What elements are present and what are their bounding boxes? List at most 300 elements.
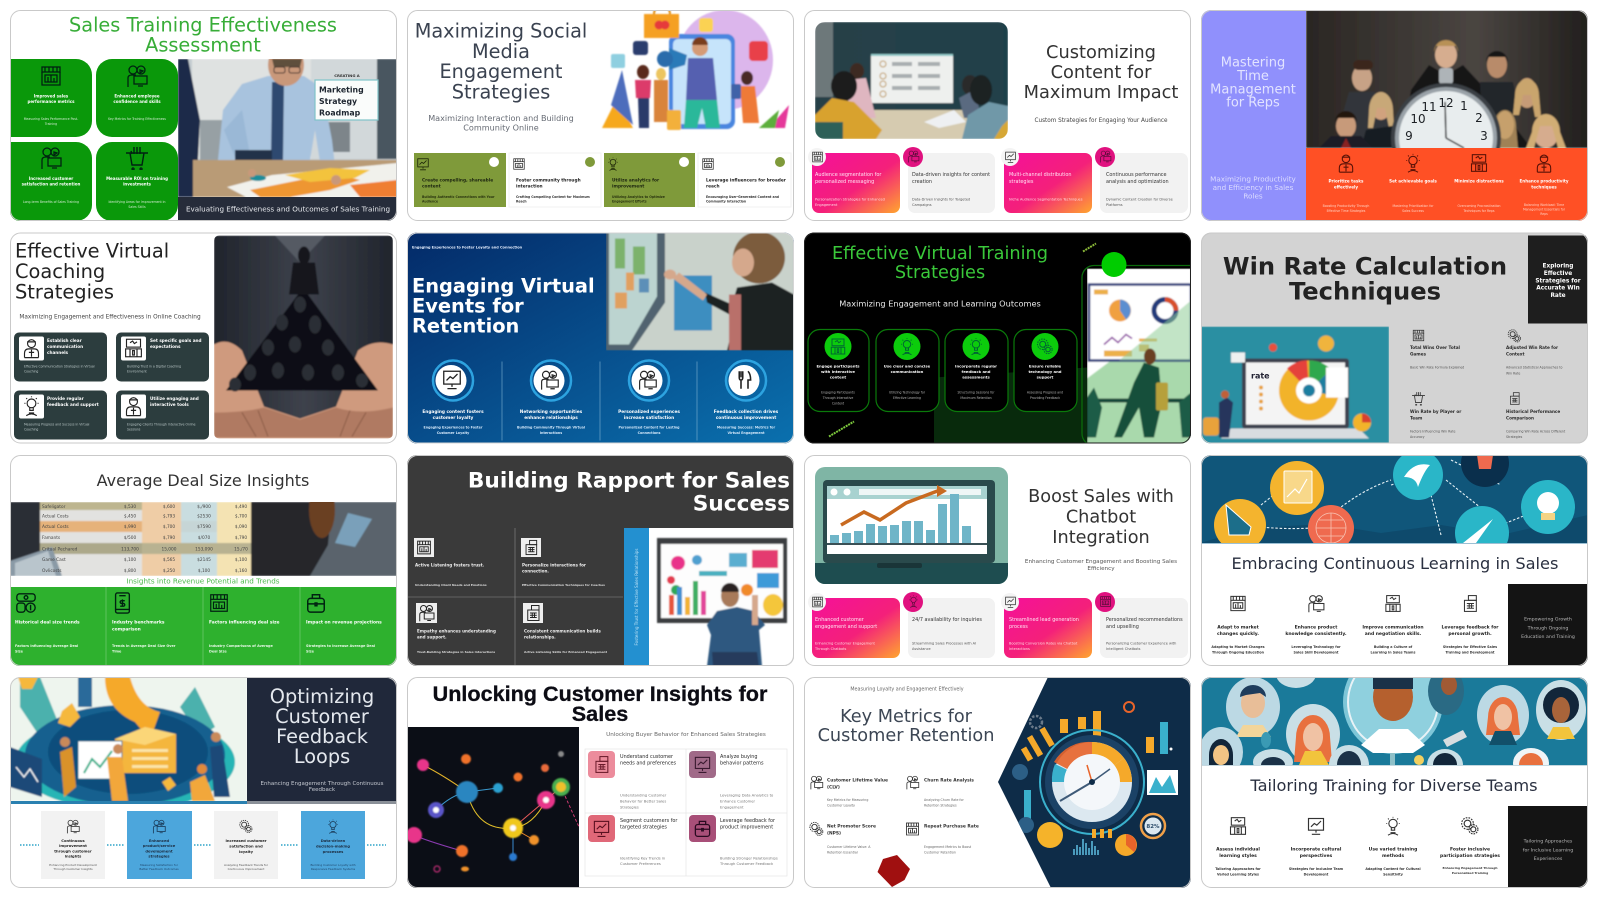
table values: $2145 — [197, 557, 211, 563]
icon — [907, 776, 919, 789]
subtitle: Efficiency — [1087, 566, 1115, 572]
subtext: Engagement — [720, 805, 744, 809]
item: NPS — [810, 822, 876, 855]
subtitle: Custom Strategies for Engaging Your Audience — [1035, 118, 1168, 124]
panel: Engaging Virtual Events for Retention — [407, 232, 794, 444]
item: adjusted win rate — [1506, 330, 1563, 375]
icon — [810, 822, 823, 835]
icon — [1309, 596, 1324, 612]
title: Maximum Impact — [1024, 82, 1178, 103]
subtext: Factors Influencing Average Deal — [15, 644, 78, 648]
subtext: Through Customer Feedback — [719, 862, 774, 866]
icon tile — [416, 603, 437, 623]
heading: Data-driven — [321, 839, 346, 843]
subtext: Leveraging Data Analytics to — [720, 793, 774, 797]
title: Strategies — [15, 280, 114, 303]
callout: black box: Exploring — [1543, 264, 1573, 270]
heading: Utilize engaging and — [150, 396, 199, 401]
subtext: Engaging Experiences to Foster — [424, 426, 483, 430]
subtext: Time — [112, 650, 122, 654]
heading: Provide regular — [47, 396, 85, 401]
subtext: Providing Feedback — [1030, 396, 1060, 400]
table values: $,160 — [235, 568, 247, 574]
heading: methods — [1382, 853, 1404, 859]
illustration: social media team — [602, 6, 789, 130]
sign: creating a marketing strategy roadmap: Marketing — [319, 86, 364, 94]
icon: store — [514, 159, 524, 169]
title: Strategies — [895, 263, 985, 283]
table values: 113,700 — [121, 546, 139, 552]
subtext: Basic Win Rate Formula Explained — [1410, 366, 1464, 370]
clock numerals: 3 — [1480, 129, 1488, 143]
table values: Actual Costs — [42, 524, 69, 530]
illustration: data network — [406, 727, 579, 888]
item: total wins — [1410, 330, 1464, 370]
heading: loyalty — [239, 850, 254, 854]
panel: Effective Virtual Coaching Strategies — [10, 232, 397, 444]
green panel — [10, 587, 397, 666]
heading: personal growth. — [1448, 631, 1492, 637]
accent: red polygon — [878, 855, 910, 887]
title: Customer — [275, 705, 369, 728]
icon — [1386, 596, 1400, 611]
clock numerals: 10 — [1410, 112, 1426, 126]
subtext: Niche Audience Segmentation Techniques — [1009, 198, 1083, 202]
subtext: Customer Loyalty — [827, 804, 855, 808]
subtext: Reps — [1540, 212, 1548, 216]
subtext: Retention Strategies — [924, 804, 957, 808]
heading: Assess individual — [1216, 846, 1260, 852]
card: increased customer satisfaction — [10, 142, 92, 221]
title: Time — [1236, 69, 1269, 84]
title: Strategies — [452, 80, 550, 103]
icon: gear badge — [1001, 148, 1019, 166]
subtitle: Maximizing Engagement and Learning Outcomes — [839, 298, 1041, 308]
heading: (NPS) — [827, 830, 841, 836]
table values: $,790 — [163, 535, 175, 541]
photo: team behind clock — [1306, 10, 1588, 193]
screen label: rate — [1251, 372, 1270, 380]
item: minimize distractions — [1454, 155, 1504, 213]
heading: Repeat Purchase Rate — [924, 824, 979, 830]
title: Loops — [294, 745, 350, 768]
subtext: Key Metrics for Training Effectiveness — [108, 117, 166, 121]
card: provide regular feedback — [14, 390, 107, 440]
heading: content — [830, 374, 846, 380]
heading: Set specific goals and — [150, 338, 202, 343]
table values: $,100 — [235, 557, 247, 563]
strip: rotated subtitle: Fostering Trust for Effective Sales Relationships — [634, 548, 639, 646]
subtext: Measuring Sales Performance Post- — [24, 117, 78, 121]
subtext: Strategies — [1506, 435, 1523, 439]
subtext: Effective Communication Strategies in Virtual — [24, 364, 95, 368]
callout: black box: Effective — [1544, 271, 1572, 277]
heading: Empathy enhances understanding — [417, 628, 496, 634]
heading: and support. — [417, 634, 447, 640]
subtext: Analyzing Feedback Trends for — [224, 863, 269, 867]
heading: Enhanced customer — [815, 617, 865, 623]
subtext: Crafting Compelling Content for Maximum — [516, 195, 590, 199]
heading: Segment customers for — [620, 818, 678, 824]
panel: Sales Training Effectiveness Assessment — [10, 10, 397, 221]
icon tile — [19, 336, 44, 360]
card: improved sales performance metrics — [10, 59, 92, 137]
subtext: Data-Driven Insights for Targeted — [912, 198, 970, 202]
heading: Prioritize tasks — [1329, 178, 1364, 184]
subtext: Leveraging Technology for — [1291, 645, 1341, 649]
card: continuous improvement — [41, 811, 105, 879]
table values: Safeligator — [42, 504, 66, 510]
subtext: Assessing Progress and — [1027, 390, 1063, 394]
heading: Adapt to market — [1217, 624, 1260, 630]
card: engage participants — [808, 330, 869, 412]
card: utilize interactive tools — [116, 390, 209, 440]
subtext: Enhancing Product Development — [49, 863, 98, 867]
table values: Critual Pechared — [42, 546, 78, 552]
icon tile — [19, 394, 44, 418]
card: enhanced employee confidence — [96, 59, 178, 137]
callout: black box: Education and Training — [1521, 634, 1575, 640]
icon — [1386, 817, 1400, 835]
subtext: Measuring Satisfaction for — [140, 863, 179, 867]
heading: with interactive — [821, 369, 855, 374]
subtext: Retention Essential — [827, 851, 858, 855]
heading: personalized messaging — [815, 179, 874, 185]
callout: black box — [1528, 236, 1588, 324]
card: measurable ROI — [96, 142, 178, 221]
photo: team meeting — [815, 22, 1008, 139]
item: enhance productivity — [1519, 155, 1569, 216]
card: data-driven decisions — [301, 811, 365, 879]
heading: Incorporate cultural — [1291, 846, 1342, 852]
card: utilize analytics — [604, 153, 695, 207]
subtext: Long-term Benefits of Sales Training — [23, 200, 79, 204]
sidebar: purple — [1201, 10, 1306, 221]
cell: understand customer needs — [588, 751, 677, 809]
subtext: Trends in Average Deal Size Over — [112, 644, 176, 648]
heading: Increased customer — [225, 839, 267, 843]
item: historical performance — [1506, 393, 1566, 439]
subtext: Better Feedback Outcomes — [139, 867, 179, 871]
heading: confidence and skills — [113, 99, 161, 104]
icon ring — [433, 360, 473, 400]
strip: rotated subtitle — [624, 528, 649, 666]
item: assess learning styles — [1215, 818, 1261, 876]
subtext: Adapting to Market Changes — [1211, 645, 1265, 649]
heading: communication — [47, 344, 83, 349]
subtext: Strategies for Effective Sales — [1443, 645, 1497, 649]
heading: channels — [47, 350, 69, 355]
table values: $/070 — [198, 535, 210, 541]
heading: Enhanced employee — [114, 94, 160, 98]
illustration: win rate laptop — [1201, 326, 1389, 444]
heading: technology and — [1028, 369, 1062, 374]
subtext: Building Customer Loyalty with — [310, 863, 356, 867]
eyebrow: Engaging Experiences to Foster Loyalty and Connection — [412, 246, 523, 250]
heading: Audience segmentation for — [815, 172, 882, 178]
dividers — [502, 362, 697, 440]
heading: engagement and support — [815, 624, 877, 630]
card: personalized recommendations — [1095, 592, 1188, 658]
table values: $,800 — [124, 568, 136, 574]
panel: Boost Sales with Chatbot Integration — [804, 455, 1191, 666]
item: win rate by player — [1410, 392, 1462, 439]
clock numerals: 1 — [1460, 99, 1468, 113]
subtext: Sales Skills — [128, 205, 146, 209]
subtext: Campaigns — [912, 203, 932, 207]
subtext: Coaching — [24, 370, 38, 374]
panel: Optimizing Customer Feedback Loops — [10, 677, 397, 888]
subtext: Customer Loyalty — [437, 431, 470, 435]
icon circle — [1032, 333, 1058, 360]
card: streamlined lead generation — [1001, 593, 1092, 658]
icon tile — [588, 815, 615, 842]
subtext: Through Interactive — [822, 396, 853, 400]
subtext: Training and Development — [1446, 650, 1495, 654]
subtext: Industry Comparisons of Average — [209, 644, 273, 648]
heading: knowledge consistently. — [1285, 631, 1347, 637]
icon badge — [1001, 593, 1019, 611]
item: adapt to market — [1211, 596, 1265, 654]
illustration: retention dial: 82% — [1146, 824, 1160, 830]
heading: Adjusted Win Rate for — [1506, 345, 1559, 350]
cell: personalize interactions — [521, 538, 605, 587]
table values: $,100 — [198, 568, 210, 574]
item: churn rate — [907, 776, 974, 808]
subtext: Analyzing Churn Rate for — [924, 798, 964, 802]
subtext: Coaching — [24, 428, 38, 432]
item: incorporate perspectives — [1289, 818, 1344, 876]
subtext: Personalized Content for Lasting — [618, 426, 680, 430]
subtext: Identifying Key Trends in — [620, 856, 666, 860]
heading: continuous improvement — [716, 415, 776, 421]
subtext: Community Interaction — [706, 200, 746, 204]
illustration: learning network — [1201, 439, 1588, 560]
icon tile — [689, 815, 716, 842]
title: Building Rapport for Sales — [468, 469, 790, 494]
squiggle accents — [829, 244, 1096, 436]
table values: $,565 — [163, 557, 175, 563]
title: Feedback — [276, 725, 369, 748]
icon: pink badge — [1095, 147, 1115, 167]
card: use clear communication — [876, 330, 939, 412]
heading: Establish clear — [47, 338, 83, 343]
illustration: feedback box and team — [10, 677, 247, 810]
subtext: Through Customer Insights — [52, 867, 93, 871]
heading: Use clear and concise — [884, 364, 931, 368]
badge — [679, 157, 689, 167]
item: personalized experiences — [618, 360, 680, 435]
subtext: Understanding Client Needs and Emotions — [415, 583, 487, 587]
sign: creating a marketing strategy roadmap — [315, 73, 378, 120]
icon — [116, 593, 129, 613]
subtext: Comparing Win Rate Across Different — [1506, 430, 1566, 434]
icon — [153, 820, 165, 833]
icon — [1508, 330, 1520, 342]
title: Content for — [1051, 62, 1152, 83]
icon — [1472, 155, 1486, 171]
heading: through customer — [54, 849, 92, 853]
icon — [67, 820, 79, 833]
title: Techniques — [1289, 278, 1441, 306]
table values: Actual Costs — [42, 514, 69, 520]
heading: Enhanced — [149, 839, 169, 843]
panel: Effective Virtual Training Strategies — [804, 232, 1202, 446]
subtext: Sessions — [127, 428, 141, 432]
subtitle: Community Online — [463, 122, 539, 132]
card: data-driven insights — [903, 147, 995, 213]
icon: people — [42, 148, 61, 169]
icon circle — [824, 333, 852, 360]
subtext: Adapting Content for Cultural — [1365, 867, 1421, 871]
subtext: Enhancing Customer Engagement — [815, 642, 876, 646]
heading: Churn Rate Analysis — [924, 778, 974, 784]
heading: processes — [323, 850, 344, 854]
clock numerals: 9 — [1405, 129, 1413, 143]
heading: Customer Lifetime Value — [827, 778, 888, 784]
orange panel — [1306, 148, 1588, 221]
subtitle: and Efficiency in Sales — [1213, 183, 1294, 192]
subtext: Streamlining Sales Processes with AI — [912, 642, 976, 646]
callout: black box: Experiences — [1534, 856, 1563, 862]
subtext: Effective Communication Techniques for Coaches — [522, 583, 605, 587]
subtext: Personalization Strategies for Enhanced — [815, 198, 885, 202]
cell: segment customers — [588, 815, 678, 866]
subtext: Content — [832, 401, 845, 405]
title: Media — [472, 40, 530, 63]
heading: Leverage feedback for — [1441, 624, 1499, 630]
item: foster inclusive participation — [1440, 818, 1500, 875]
heading: process — [1009, 624, 1028, 630]
subtext: Balancing Workload: Time — [1524, 203, 1564, 207]
subtext: Sensitivity — [1383, 872, 1404, 876]
icon — [1413, 330, 1424, 341]
subtext: Size — [306, 650, 315, 654]
subtext: Enhancing Engagement Through — [1442, 866, 1498, 870]
heading: Leverage influencers for broader — [706, 178, 787, 184]
heading: Total Wins Over Total — [1410, 345, 1461, 350]
heading: Feedback collection drives — [714, 409, 779, 415]
panel: Customizing Content for Maximum Impact — [804, 10, 1191, 221]
icon circle — [962, 333, 990, 360]
table values: $,793 — [163, 514, 175, 520]
subtext: Strategies for Inclusive Team — [1289, 867, 1344, 871]
badge — [775, 157, 785, 167]
heading: and upselling — [1106, 624, 1139, 630]
item: set achievable goals — [1389, 154, 1437, 213]
cell: leverage feedback — [689, 815, 778, 866]
heading: improvement — [59, 844, 87, 848]
table values: $7590 — [197, 524, 211, 530]
table values: $,450 — [124, 514, 136, 520]
item: prioritize tasks — [1323, 155, 1369, 213]
subtitle: Enhancing Engagement Through Continuous — [260, 781, 384, 787]
icon — [1462, 818, 1478, 834]
badge — [585, 157, 595, 167]
card: continuous performance — [1095, 147, 1188, 213]
subtext: Identifying Areas for Improvement in — [108, 200, 166, 204]
heading: Enhance productivity — [1519, 178, 1569, 184]
panel: Maximizing Social Media Engagement Strategies — [407, 6, 794, 221]
eyebrow: Measuring Loyalty and Engagement Effectively — [850, 687, 964, 693]
heading: behavior patterns — [720, 760, 764, 766]
accent circle — [1102, 252, 1126, 277]
panel: Building Rapport for Sales Success — [407, 455, 794, 666]
icon — [17, 594, 35, 612]
subtext: Accuracy — [1410, 435, 1425, 439]
icon badge — [808, 593, 826, 611]
grid lines — [585, 749, 787, 876]
icon — [1339, 155, 1353, 172]
cell: analyze buying behavior — [689, 751, 774, 809]
title: Customer Retention — [818, 726, 994, 746]
heading: Minimize distractions — [1454, 178, 1504, 184]
table values: $,250 — [163, 568, 175, 574]
photo: spreadsheet and analyst — [10, 482, 397, 576]
icon: store badge — [808, 148, 826, 166]
table values: $,090 — [235, 524, 247, 530]
subtext: Audience — [422, 200, 438, 204]
subtext: Learning in Sales Teams — [1371, 650, 1415, 654]
table values: $2530 — [197, 514, 211, 520]
panel: Embracing Continuous Learning in Sales — [1201, 439, 1588, 666]
heading: Win Rate by Player or — [1410, 409, 1462, 414]
sign: creating a marketing strategy roadmap: CREATING A — [334, 73, 360, 78]
title: Success — [693, 492, 790, 517]
panel: Unlocking Customer Insights for Sales — [406, 677, 794, 888]
heading: Comparison — [1506, 416, 1534, 420]
heading: content — [422, 184, 441, 190]
illustration: retention dial — [994, 677, 1191, 888]
title: Coaching — [15, 260, 105, 283]
heading: changes quickly. — [1217, 631, 1259, 637]
callout: black box: Empowering Growth — [1524, 617, 1572, 623]
illustration: diverse team portraits — [1199, 650, 1588, 785]
heading: Improve communication — [1362, 624, 1424, 630]
subtext: Development — [1304, 872, 1329, 876]
subtext: Effective Learning — [893, 396, 921, 400]
title: Optimizing — [270, 685, 374, 708]
heading: Team — [1410, 416, 1423, 420]
subtext: Advanced Statistical Approaches to — [1506, 366, 1563, 370]
cell: active listening — [414, 538, 487, 587]
subtext: Through Ongoing Education — [1212, 650, 1265, 654]
subtext: Interactions — [540, 431, 562, 435]
heading: development — [145, 849, 173, 853]
heading: creation — [912, 179, 932, 185]
heading: support — [1037, 374, 1054, 380]
heading: enhance relationships — [524, 415, 578, 421]
clock numerals: 2 — [1475, 111, 1483, 125]
card: ensure reliable technology — [1014, 330, 1077, 412]
icon — [1406, 154, 1420, 172]
illustration: dashboard and trainee — [1082, 252, 1202, 446]
subtext: Factors Influencing Win Rate — [1410, 430, 1455, 434]
subtext: Platforms — [1106, 203, 1123, 207]
heading: Engage participants — [816, 364, 860, 368]
icon — [1510, 393, 1519, 404]
heading: customer loyalty — [433, 415, 474, 421]
subtext: Environment — [127, 370, 148, 374]
heading: expectations — [150, 344, 181, 349]
subtext: Building Community Through Virtual — [517, 426, 585, 430]
title: Effective Virtual — [15, 240, 169, 262]
subtext: Through Chatbots — [814, 647, 847, 651]
callout: black box — [1508, 806, 1588, 888]
subtext: Interactions — [1009, 647, 1030, 651]
icon — [1308, 818, 1324, 834]
table values: $,100 — [124, 557, 136, 563]
